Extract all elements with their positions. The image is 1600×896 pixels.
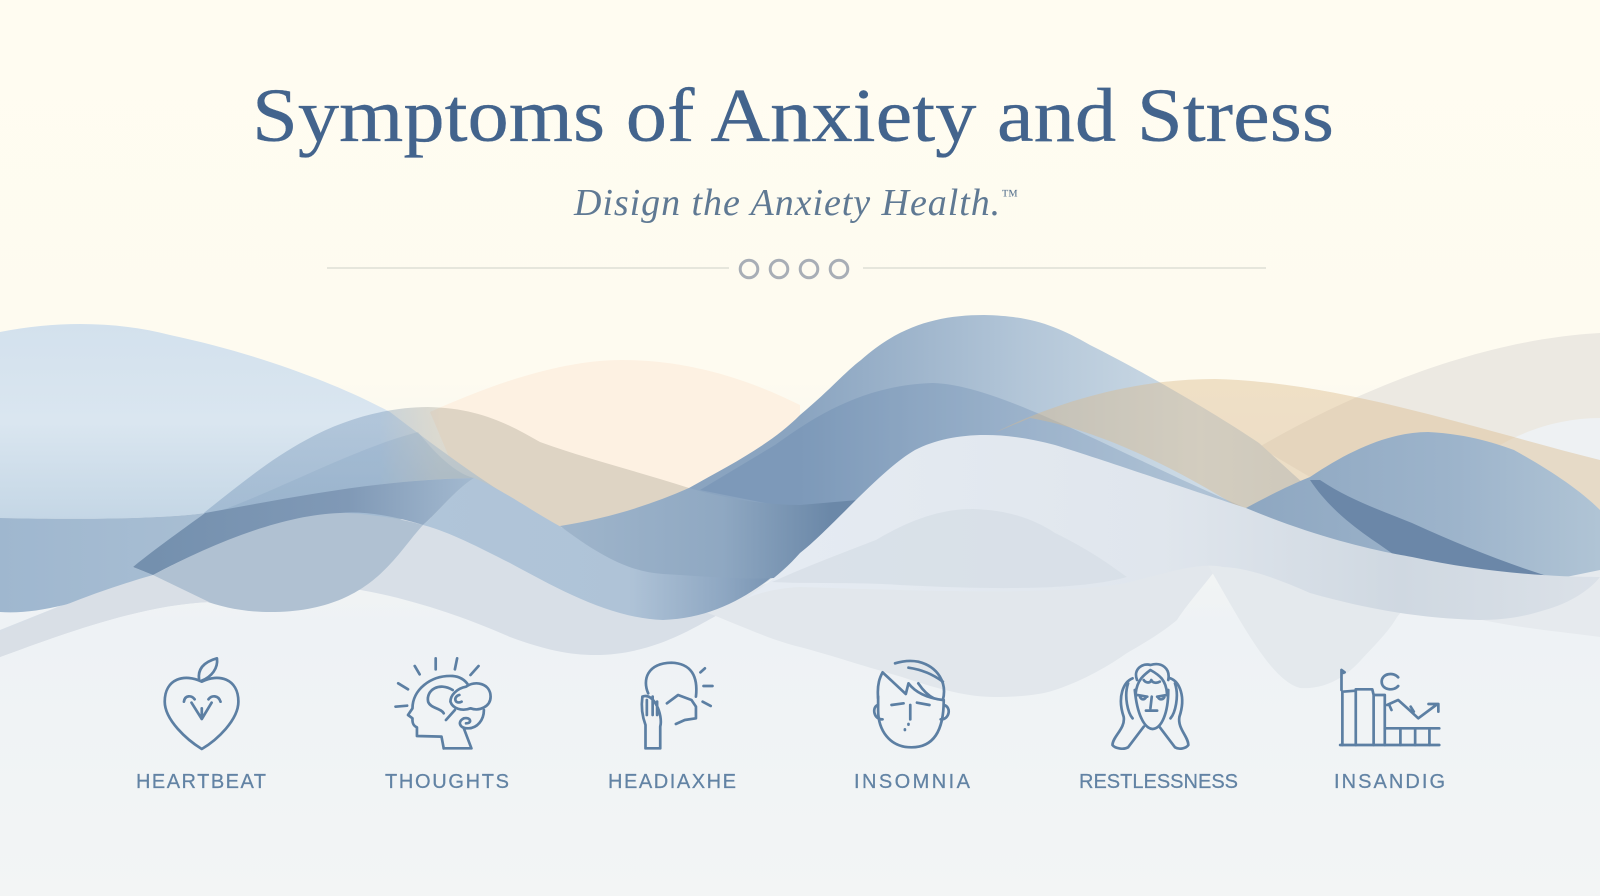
wave: far right grey lobe <box>1430 570 1600 637</box>
icon: person holding head <box>1112 664 1188 749</box>
symptom: insandig <box>1334 670 1445 793</box>
wave: inner grey hump <box>772 509 1127 588</box>
symptom: heartbeat <box>136 658 266 793</box>
wave: translucent left hump <box>133 407 689 567</box>
icon: sleeping face <box>874 661 949 747</box>
wave: left lower band <box>0 513 205 612</box>
wave: peach hill <box>430 360 800 530</box>
wave: darker band right of ribbon <box>560 488 858 579</box>
wave: dark ribbon <box>133 478 474 575</box>
divider with four circles <box>327 260 1266 278</box>
icon: head with brain <box>396 658 491 748</box>
label: restlessness: RESTLESSNESS <box>1079 771 1238 793</box>
wave: lower grey lobe centre <box>700 560 1223 697</box>
icon: heart <box>165 658 238 749</box>
wave: main blue wave <box>423 478 810 620</box>
wave: lobe under ribbon <box>153 513 423 612</box>
label: insomnia: INSOMNIA <box>854 771 971 793</box>
wave: inner darker hump <box>700 383 1250 520</box>
wave: right blue hill <box>1246 432 1600 590</box>
label: thoughts: THOUGHTS <box>385 771 509 793</box>
label: insandig: INSANDIG <box>1334 771 1445 793</box>
wave: inner wedge of left hump <box>214 432 474 513</box>
wave: grey lower sweep <box>0 515 800 657</box>
wave: right pale hill <box>1500 418 1600 520</box>
symptom: insomnia <box>854 661 971 793</box>
symptom: headache <box>608 663 736 793</box>
wave: left light blue hill <box>0 324 561 540</box>
wave: tan band <box>994 379 1600 595</box>
symptom: thoughts <box>385 658 509 793</box>
wave: right grey hill <box>1259 333 1600 530</box>
layered waves illustration <box>0 315 1600 697</box>
label: heartbeat: HEARTBEAT <box>136 771 266 793</box>
icon: bar and line chart <box>1340 670 1439 745</box>
symptom: restlessness <box>1079 664 1238 793</box>
title: Symptoms of Anxiety and Stress <box>252 74 1334 158</box>
wave: pale sweeping wave <box>745 435 1600 620</box>
label: headache: HEADIAXHE <box>608 771 736 793</box>
wave: central blue hump <box>564 315 1600 590</box>
icon: head with hand <box>642 663 712 748</box>
wave: lower grey lobe right <box>1205 560 1420 688</box>
subtitle: ™ <box>1001 186 1018 205</box>
wave: dark sliver <box>1310 480 1560 580</box>
subtitle: Disign the Anxiety Health. <box>574 182 1001 224</box>
wave: far-left pale sliver <box>0 575 209 657</box>
